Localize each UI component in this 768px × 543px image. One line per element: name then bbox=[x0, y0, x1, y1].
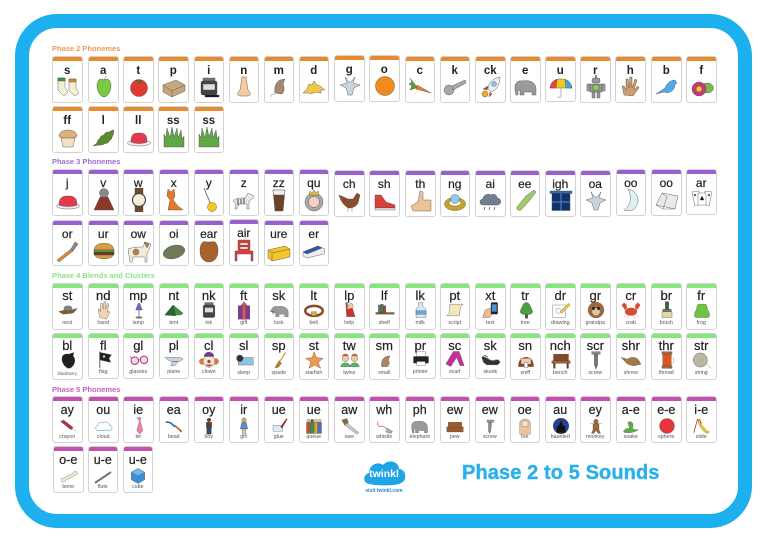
card: sk skunk bbox=[475, 332, 506, 379]
card: c carrot: c bbox=[417, 65, 423, 77]
card: a-e snake: a-e bbox=[622, 403, 640, 417]
card: cl clown: clown bbox=[202, 369, 216, 375]
card: oe toe: toe bbox=[521, 434, 528, 440]
card: br brush bbox=[651, 283, 682, 330]
card: l leaf bbox=[88, 106, 118, 152]
card: ue glue: ue bbox=[272, 403, 286, 417]
card: au haunted bbox=[545, 396, 576, 442]
card: thr thread: thr bbox=[659, 338, 674, 353]
card: wh whistle: wh bbox=[376, 403, 392, 417]
card: fl flag: flag bbox=[99, 369, 108, 375]
card: g goat: g bbox=[346, 64, 353, 76]
card: oy boy: oy bbox=[202, 403, 215, 417]
card: igh night: igh bbox=[552, 177, 568, 191]
card: i-e slide: i-e bbox=[694, 403, 708, 417]
card: ey monkey: ey bbox=[589, 403, 602, 417]
card: th thumb bbox=[405, 170, 436, 216]
card: ph elephant: elephant bbox=[410, 434, 430, 440]
card: lk milk bbox=[405, 283, 436, 330]
card: sm small: sm bbox=[376, 338, 393, 353]
card: ay crayon bbox=[52, 396, 82, 442]
card: igh night bbox=[545, 170, 576, 216]
card: nch bench bbox=[545, 333, 576, 380]
card: mp lamp bbox=[123, 283, 154, 330]
card: x fox: x bbox=[171, 176, 177, 190]
card: v volcano: v bbox=[100, 176, 106, 190]
card: ar cards: ar bbox=[696, 176, 707, 190]
card: shr shrew: shrew bbox=[624, 370, 638, 376]
card: str string: string bbox=[695, 370, 708, 376]
card: d dinosaur bbox=[298, 56, 329, 102]
card: nt tent: tent bbox=[169, 320, 178, 326]
card: m mouse bbox=[264, 56, 294, 102]
card: aw saw bbox=[334, 396, 364, 442]
card: fr frog bbox=[686, 283, 716, 330]
card: st nest bbox=[52, 283, 82, 330]
card: scr screw: screw bbox=[588, 370, 602, 376]
card: pt script bbox=[440, 283, 470, 330]
card: pl plane: plane bbox=[167, 369, 180, 375]
card: str string: str bbox=[694, 338, 708, 353]
card: sc scarf: sc bbox=[448, 338, 461, 352]
card: h hand: h bbox=[627, 65, 634, 77]
card: o-e bone: o-e bbox=[59, 453, 77, 467]
card: ear bear bbox=[194, 220, 224, 266]
card: ur burger bbox=[88, 220, 118, 266]
card: sp spade: sp bbox=[272, 338, 286, 353]
card: fr frog: frog bbox=[697, 320, 706, 326]
card: sl sleep bbox=[228, 333, 259, 380]
card: cr crab: crab bbox=[626, 320, 636, 326]
card: pr printer: printer bbox=[413, 369, 428, 375]
card: u umbrella bbox=[545, 56, 576, 102]
card: nk ink: nk bbox=[202, 288, 216, 303]
card: ay crayon: ay bbox=[61, 403, 74, 417]
card: ea bead bbox=[158, 396, 189, 442]
card: sn sniff: sniff bbox=[520, 370, 530, 376]
card: st starfish bbox=[298, 333, 329, 380]
card: ay crayon: crayon bbox=[59, 434, 75, 440]
card: a apple: a bbox=[100, 65, 106, 77]
card: z zebra: z bbox=[241, 176, 247, 190]
card: str string bbox=[686, 333, 716, 380]
card: ey monkey: monkey bbox=[586, 434, 605, 440]
card: ck rocket bbox=[475, 56, 506, 102]
logo: twinkl cloud: twinkl bbox=[369, 468, 399, 480]
card: r robot: r bbox=[593, 65, 597, 77]
card: oo moon: oo bbox=[624, 176, 637, 190]
card: sn sniff bbox=[510, 333, 540, 380]
card: cr crab: cr bbox=[625, 288, 636, 303]
card: nt tent: nt bbox=[168, 288, 179, 303]
card: i-e slide: slide bbox=[696, 434, 707, 440]
card: h hand bbox=[615, 56, 646, 102]
card: fr frog: fr bbox=[697, 288, 705, 303]
card: oy boy bbox=[194, 396, 224, 442]
card: thr thread bbox=[651, 333, 682, 380]
card: sk tusk: tusk bbox=[274, 320, 284, 326]
card: or fork bbox=[52, 220, 82, 266]
card: ear bear: ear bbox=[200, 226, 217, 240]
card: ng ring bbox=[440, 170, 470, 216]
card: oe toe bbox=[510, 396, 540, 442]
card: ar cards bbox=[686, 168, 716, 215]
card: ue queue bbox=[298, 396, 329, 442]
card: st starfish: st bbox=[309, 338, 319, 353]
card: gl glasses bbox=[123, 332, 154, 379]
card: y yo-yo bbox=[194, 169, 224, 216]
card: ft gift: gift bbox=[240, 320, 247, 326]
card: au haunted: au bbox=[553, 403, 567, 417]
card: e-e sphere: e-e bbox=[657, 403, 675, 417]
card: ir girl bbox=[228, 396, 259, 442]
card: fl flag bbox=[88, 332, 118, 379]
card: sh shoe bbox=[369, 170, 400, 216]
card: sk skunk: sk bbox=[484, 338, 497, 352]
card: br brush: brush bbox=[660, 320, 673, 326]
card: oi coin: oi bbox=[169, 226, 178, 240]
card: w watch bbox=[123, 169, 154, 216]
card: cr crab bbox=[616, 283, 646, 330]
card: g goat bbox=[334, 55, 364, 102]
card: ng ring: ng bbox=[448, 177, 461, 191]
card: ue queue: queue bbox=[306, 434, 321, 440]
card: ew screw bbox=[474, 396, 505, 442]
card: ff muffin: ff bbox=[63, 115, 71, 127]
card: pr printer: pr bbox=[414, 338, 426, 352]
card: l leaf: l bbox=[102, 115, 105, 127]
card: er eraser: er bbox=[308, 226, 319, 240]
card: ie tie: ie bbox=[133, 403, 143, 417]
card: s socks: s bbox=[64, 65, 70, 77]
card: o orange bbox=[369, 55, 400, 102]
card: au haunted: haunted bbox=[551, 434, 570, 440]
card: pt script: script bbox=[448, 320, 461, 326]
card: ure treasure bbox=[264, 220, 294, 266]
card: u-e cube bbox=[122, 446, 153, 492]
card: wh whistle bbox=[369, 396, 400, 442]
card: ft gift bbox=[228, 283, 259, 330]
card: f flower: f bbox=[699, 65, 703, 77]
card: pl plane bbox=[158, 332, 189, 379]
card: er eraser bbox=[298, 220, 329, 266]
card: sk tusk bbox=[264, 283, 294, 330]
card: u umbrella: u bbox=[557, 64, 564, 76]
card: lt belt: lt bbox=[310, 288, 317, 303]
card: sn sniff: sn bbox=[518, 338, 532, 353]
card: tr tree: tr bbox=[521, 288, 529, 303]
card: ee leek: ee bbox=[518, 177, 531, 191]
card: sm small: small bbox=[378, 370, 390, 376]
card: u-e flute bbox=[88, 446, 118, 492]
card: ll jelly: ll bbox=[135, 115, 141, 127]
card: oa goat: oa bbox=[589, 177, 602, 191]
card: o orange: o bbox=[381, 64, 388, 76]
card: sp spade bbox=[264, 333, 294, 380]
card: sp spade: spade bbox=[272, 370, 286, 376]
card: aw saw: saw bbox=[345, 434, 354, 440]
card: ew screw: screw bbox=[483, 434, 497, 440]
card: ue glue: glue bbox=[274, 434, 284, 440]
card: j jelly bbox=[52, 169, 82, 216]
card: sc scarf bbox=[440, 332, 470, 379]
card: ph elephant: ph bbox=[413, 403, 427, 417]
card: wh whistle: whistle bbox=[376, 434, 392, 440]
card: or fork: or bbox=[62, 226, 73, 240]
card: a apple bbox=[88, 56, 118, 102]
card: lk milk: milk bbox=[416, 320, 425, 326]
card: thr thread: thread bbox=[659, 370, 674, 376]
card: xt text: text bbox=[486, 320, 495, 326]
card: ur burger: ur bbox=[98, 226, 109, 240]
card: m mouse: m bbox=[274, 65, 284, 77]
card: nd hand bbox=[88, 283, 118, 330]
card: th thumb: th bbox=[415, 177, 425, 191]
card: lk milk: lk bbox=[416, 288, 425, 303]
card: ou cloud bbox=[88, 396, 118, 442]
card: xt text bbox=[475, 283, 506, 330]
card: ss grass bbox=[158, 106, 188, 152]
card: tw twins: tw bbox=[343, 338, 356, 353]
card: ue glue bbox=[264, 396, 294, 442]
card: br brush: br bbox=[660, 288, 672, 303]
card: y yo-yo: y bbox=[206, 176, 212, 190]
card: sc scarf: scarf bbox=[449, 369, 460, 375]
card: nk ink bbox=[194, 283, 224, 330]
card: dr drawing: drawing bbox=[551, 320, 570, 326]
card: sl sleep: sl bbox=[239, 338, 248, 353]
card: bl blackberry: blackberry bbox=[58, 370, 77, 376]
card: ie tie: tie bbox=[135, 434, 141, 440]
card: ir girl: girl bbox=[240, 434, 247, 440]
card: i ink bbox=[194, 56, 224, 102]
card: k key: k bbox=[452, 65, 458, 77]
card: lp help: lp bbox=[344, 288, 354, 303]
card: gr grandpa: gr bbox=[589, 288, 601, 303]
card: ss grass: ss bbox=[167, 115, 180, 127]
card: pl plane: pl bbox=[169, 338, 179, 352]
card: gr grandpa: grandpa bbox=[586, 320, 605, 326]
card: e-e sphere bbox=[651, 396, 682, 442]
card: e elephant bbox=[510, 56, 540, 102]
card: bl blackberry bbox=[52, 333, 82, 380]
card: qu queen: qu bbox=[307, 176, 320, 190]
card: tr tree bbox=[510, 283, 540, 330]
card: lf shelf bbox=[369, 283, 400, 330]
card: a-e snake bbox=[616, 396, 646, 442]
card: r robot bbox=[580, 56, 610, 102]
card: mp lamp: mp bbox=[129, 288, 147, 303]
card: ew pew bbox=[440, 396, 470, 442]
card: st nest: st bbox=[62, 288, 72, 303]
card: i-e slide bbox=[686, 396, 716, 442]
card: ue queue: ue bbox=[307, 403, 321, 417]
card: nt tent bbox=[158, 283, 189, 330]
card: oe toe: oe bbox=[518, 403, 532, 417]
card: nk ink: ink bbox=[205, 320, 212, 326]
card: t tomato: t bbox=[136, 65, 140, 77]
card: ou cloud: cloud bbox=[97, 434, 110, 440]
card: gr grandpa bbox=[580, 283, 610, 330]
card: ey monkey bbox=[580, 396, 610, 442]
heading: Phase 4 Blends and Clusters: Phase 4 Blends and Clusters bbox=[52, 271, 155, 280]
card: dr drawing: dr bbox=[554, 288, 566, 303]
card: ure treasure: ure bbox=[270, 226, 287, 240]
card: tw twins: twins bbox=[343, 370, 355, 376]
card: lp help bbox=[334, 283, 364, 330]
card: sk skunk: skunk bbox=[483, 369, 497, 375]
card: oy boy: boy bbox=[204, 434, 213, 440]
card: j jelly: j bbox=[66, 176, 69, 190]
card: o-e bone: bone bbox=[62, 484, 74, 490]
card: ea bead: ea bbox=[167, 403, 181, 417]
card: st nest: nest bbox=[62, 320, 72, 326]
card: ph elephant bbox=[404, 396, 435, 442]
card: ck rocket: ck bbox=[484, 65, 497, 77]
card: p parcel bbox=[158, 56, 188, 102]
card: i ink: i bbox=[207, 65, 210, 77]
card: u-e cube: u-e bbox=[129, 453, 147, 467]
card: lp help: help bbox=[344, 320, 354, 326]
card: sh shoe: sh bbox=[378, 177, 391, 191]
card: ow cow bbox=[123, 220, 154, 266]
card: ss grass 2 bbox=[194, 106, 224, 152]
card: lf shelf: lf bbox=[381, 288, 388, 303]
card: ch chicken bbox=[334, 170, 364, 216]
card: o-e bone bbox=[53, 446, 84, 492]
card: gl glasses: gl bbox=[133, 338, 143, 352]
card: sk tusk: sk bbox=[272, 288, 285, 303]
card: dr drawing bbox=[545, 283, 576, 330]
card: ew screw: ew bbox=[482, 403, 498, 417]
card: ou cloud: ou bbox=[96, 403, 110, 417]
card: air chair: air bbox=[237, 226, 250, 240]
card: oo book: oo bbox=[660, 176, 673, 190]
card: t tomato bbox=[123, 56, 154, 102]
card: sl sleep: sleep bbox=[237, 370, 250, 376]
card: ew pew: ew bbox=[447, 403, 463, 417]
card: p parcel: p bbox=[170, 65, 177, 77]
card: u-e flute: flute bbox=[98, 484, 108, 490]
card: v volcano bbox=[88, 169, 118, 216]
card: nd hand: hand bbox=[97, 320, 109, 326]
card: zz fizzy drink: zz bbox=[273, 176, 285, 190]
card: bl blackberry: bl bbox=[62, 338, 72, 353]
card: ai rain: ai bbox=[486, 177, 495, 191]
card: lf shelf: shelf bbox=[379, 320, 390, 326]
card: lt belt: belt bbox=[309, 320, 318, 326]
card: sm small bbox=[369, 333, 400, 380]
card: k key bbox=[440, 56, 470, 102]
card: a-e snake: snake bbox=[624, 434, 638, 440]
heading: Phase 2 Phonemes: Phase 2 Phonemes bbox=[52, 44, 120, 53]
card: tw twins bbox=[334, 333, 364, 380]
card: ir girl: ir bbox=[240, 403, 247, 417]
card: ai rain bbox=[475, 170, 506, 216]
card: ss grass 2: ss bbox=[202, 115, 215, 127]
card: ee leek bbox=[510, 170, 540, 216]
card: u-e flute: u-e bbox=[94, 453, 112, 467]
card: tr tree: tree bbox=[521, 320, 530, 326]
card: c carrot bbox=[404, 56, 435, 102]
card: nd hand: nd bbox=[96, 288, 110, 303]
card: pt script: pt bbox=[449, 288, 460, 303]
card: mp lamp: lamp bbox=[132, 320, 144, 326]
card: ew pew: pew bbox=[450, 434, 460, 440]
card: oa goat bbox=[580, 170, 610, 216]
logo: twinkl cloud bbox=[364, 462, 406, 494]
card: e-e sphere: sphere bbox=[658, 434, 674, 440]
card: scr screw: scr bbox=[587, 338, 604, 353]
card: ow cow: ow bbox=[131, 226, 146, 240]
card: oo moon bbox=[616, 169, 646, 216]
card: x fox bbox=[158, 169, 189, 216]
card: zz fizzy drink bbox=[264, 169, 294, 216]
card: xt text: xt bbox=[485, 288, 495, 303]
card: f flower bbox=[686, 56, 716, 102]
card: pr printer bbox=[405, 332, 436, 379]
card: oi coin bbox=[158, 220, 189, 266]
card: ft gift: ft bbox=[240, 288, 247, 303]
card: fl flag: fl bbox=[100, 338, 106, 352]
card: nch bench: nch bbox=[550, 338, 571, 353]
heading: Phase 3 Phonemes: Phase 3 Phonemes bbox=[52, 157, 120, 166]
card: w watch: w bbox=[134, 176, 143, 190]
card: ea bead: bead bbox=[168, 434, 180, 440]
card: z zebra bbox=[228, 169, 259, 216]
card: e elephant: e bbox=[522, 65, 528, 77]
card: ff muffin bbox=[52, 106, 82, 152]
card: cl clown: cl bbox=[204, 338, 213, 352]
card: ie tie bbox=[123, 396, 154, 442]
card: lt belt bbox=[298, 283, 329, 330]
card: air chair bbox=[228, 219, 259, 266]
card: ll jelly bbox=[123, 106, 154, 152]
card: shr shrew: shr bbox=[622, 338, 640, 353]
card: d dinosaur: d bbox=[310, 65, 317, 77]
card: st starfish: starfish bbox=[305, 370, 322, 376]
card: b bird bbox=[651, 56, 682, 102]
card: n nose bbox=[228, 56, 259, 102]
card: u-e cube: cube bbox=[132, 484, 144, 490]
card: qu queen bbox=[298, 169, 329, 216]
card: shr shrew bbox=[616, 333, 646, 380]
heading: Phase 5 Phonemes: Phase 5 Phonemes bbox=[52, 385, 120, 394]
card: aw saw: aw bbox=[341, 403, 357, 417]
card: b bird: b bbox=[663, 65, 670, 77]
card: s socks bbox=[52, 56, 82, 102]
card: gl glasses: glasses bbox=[129, 369, 147, 375]
card: ch chicken: ch bbox=[343, 177, 356, 191]
title: Phase 2 to 5 Sounds: Phase 2 to 5 Sounds bbox=[462, 462, 660, 484]
card: scr screw bbox=[580, 333, 610, 380]
card: cl clown bbox=[194, 332, 224, 379]
card: n nose: n bbox=[240, 65, 247, 77]
card: nch bench: bench bbox=[553, 370, 567, 376]
card: oo book bbox=[651, 169, 682, 216]
logo: twinkl cloud: visit twinkl.com bbox=[365, 488, 403, 494]
